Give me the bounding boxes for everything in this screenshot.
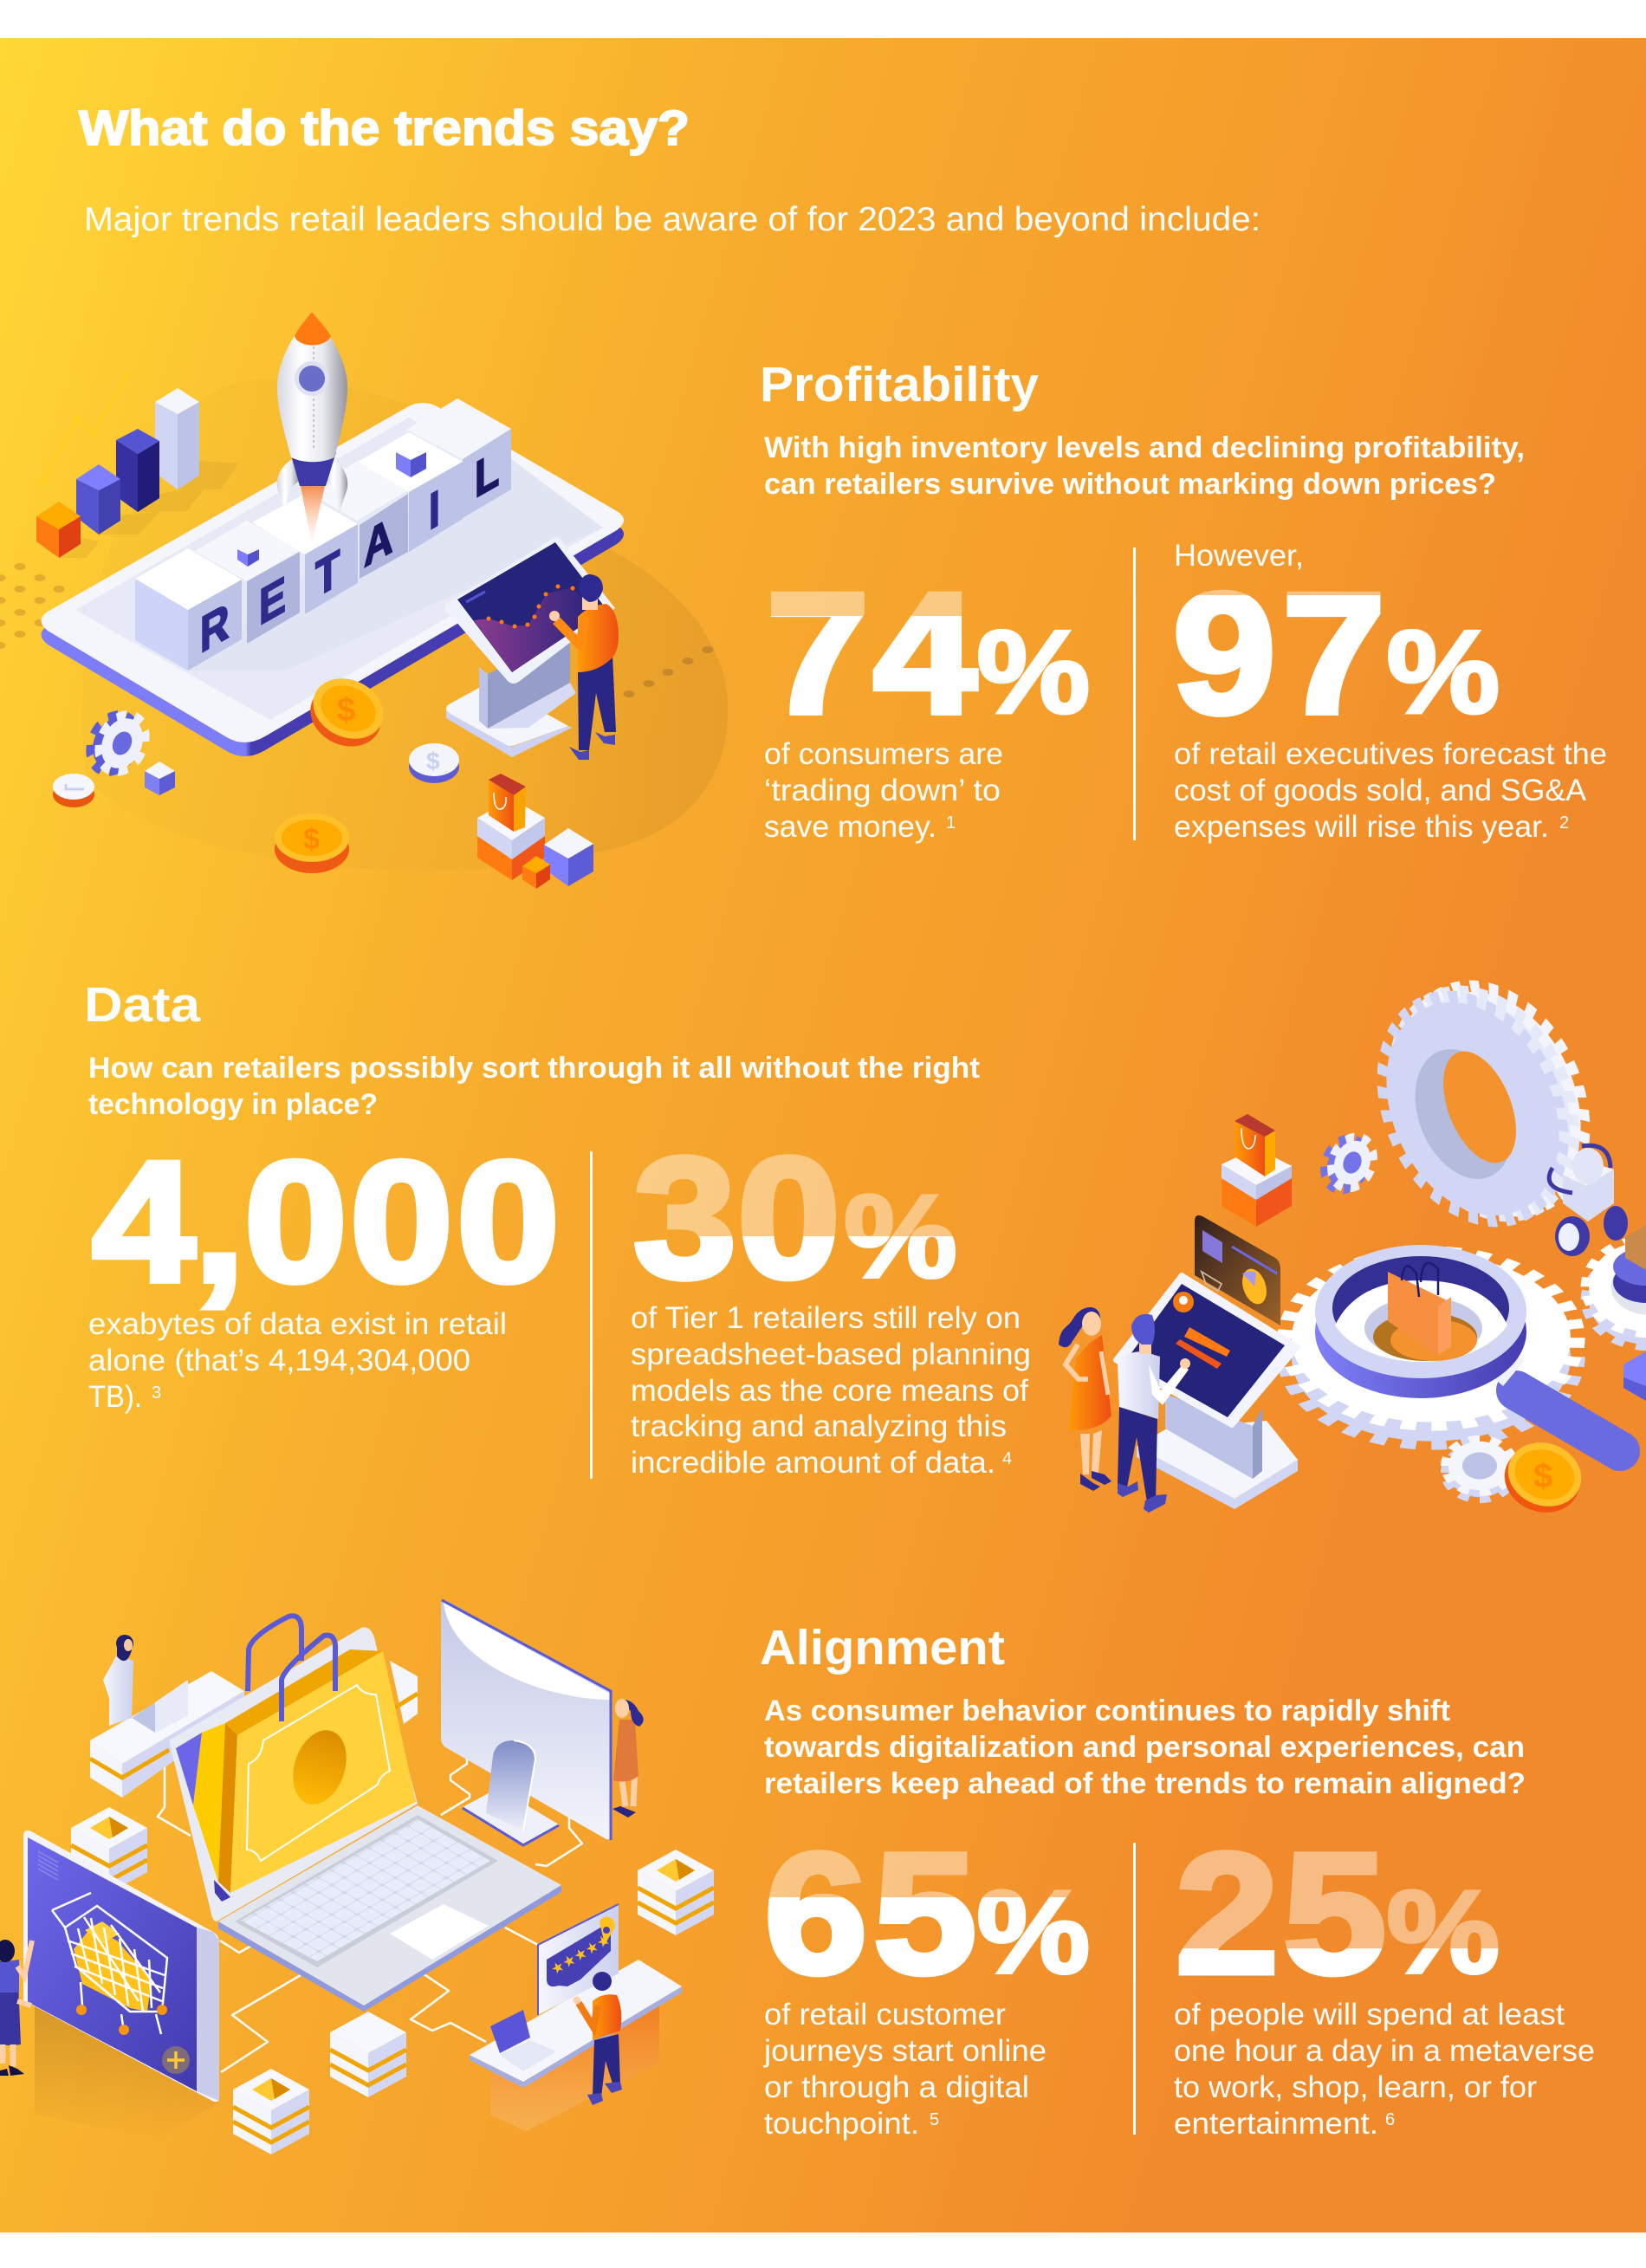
- cube: white purple: [544, 828, 593, 886]
- bar: purple: [76, 464, 120, 535]
- magnifier handle: [1488, 1353, 1620, 1451]
- question: Alignment: towards digitalization and personal experiences, can: [764, 1731, 1525, 1764]
- stack C: [330, 2012, 406, 2097]
- block: R: [135, 548, 242, 671]
- tablet with cart: [23, 1831, 219, 2140]
- stat: 65%: %: [977, 1866, 1090, 1998]
- divider: [1133, 548, 1136, 840]
- decorative dots left: [0, 563, 64, 649]
- cube: orange: [36, 502, 81, 558]
- stat caption: 30%: tracking and analyzing this: [631, 1409, 1007, 1443]
- stat caption: 97%: 2: [1559, 813, 1569, 833]
- woman at tablet: [0, 1940, 32, 2076]
- stat: 4,000: 0: [350, 1125, 453, 1318]
- question: Profitability: With high inventory levels and declining profitability,: [764, 431, 1525, 464]
- connector lines: [158, 1714, 582, 2072]
- cube: small orange: [522, 856, 550, 889]
- woman: [1059, 1307, 1111, 1491]
- monitor: [441, 1600, 612, 1845]
- stat caption: 74%: [764, 737, 1003, 844]
- big upright gear: [1348, 958, 1619, 1249]
- stat caption: 4,000: exabytes of data exist in retail: [88, 1307, 507, 1341]
- kiosk stand: [1165, 1394, 1262, 1479]
- purple box right: [1623, 1351, 1646, 1401]
- bar: navy: [116, 429, 159, 512]
- bar shadows: [59, 461, 238, 558]
- decorative dots right: [624, 646, 714, 697]
- block: T: T: [315, 539, 340, 608]
- stat caption: 25%: one hour a day in a metaverse: [1174, 2034, 1595, 2068]
- phone platform: [42, 403, 624, 756]
- robot: [1549, 1145, 1628, 1256]
- coin: silver: [409, 743, 459, 783]
- stat: 25%: 5: [1283, 1817, 1386, 2009]
- stack D: [233, 2069, 309, 2155]
- laptop deck: [218, 1805, 561, 2012]
- stat: 4,000: ,: [194, 1125, 245, 1318]
- large flat gear: [1286, 1251, 1577, 1445]
- stat caption: 25%: to work, shop, learn, or for: [1174, 2070, 1537, 2104]
- stat: 25%: 2: [1176, 1817, 1279, 2009]
- stat caption: 74%: ‘trading down’ to: [764, 774, 1001, 807]
- stat: 30%: 0: [737, 1121, 840, 1313]
- stat: 4,000: 4: [92, 1125, 195, 1318]
- question: Profitability: [764, 431, 1525, 501]
- man with tablet: [1118, 1314, 1190, 1513]
- stat: 4,000: 0: [244, 1125, 347, 1318]
- block: E: [195, 521, 300, 644]
- kiosk: [444, 537, 615, 757]
- coin: gold centre: $: [337, 692, 355, 729]
- small cube on I: [396, 452, 426, 477]
- bag handle front: [282, 1636, 335, 1721]
- coin: bottom gold: $: [303, 823, 320, 856]
- stat: 74%: 4: [873, 557, 976, 749]
- stat caption: 4,000: 3: [152, 1383, 161, 1403]
- rocket: [277, 312, 347, 511]
- small gear bottom: [1445, 1439, 1514, 1500]
- shopping cart: [52, 1893, 167, 2035]
- trend line: [40, 374, 128, 483]
- question: Data: [88, 1052, 980, 1121]
- stat caption: 30%: incredible amount of data.: [631, 1446, 995, 1480]
- stat caption: 25%: 6: [1385, 2110, 1395, 2129]
- stat: 4,000: 0: [457, 1125, 560, 1318]
- illustration: data gears and magnifier: [1059, 958, 1646, 1523]
- text: However: However,: [1174, 539, 1304, 573]
- stat caption: 97%: of retail executives forecast the: [1174, 737, 1607, 771]
- stat caption: 4,000: [88, 1307, 507, 1414]
- small cube on E: [237, 542, 259, 567]
- stat: 97%: 7: [1282, 557, 1385, 749]
- stat caption: 65%: touchpoint.: [764, 2107, 919, 2141]
- question: Data: How can retailers possibly sort through it all without the right: [88, 1052, 980, 1085]
- block: A: [306, 462, 408, 579]
- magnifier lens: [1315, 1245, 1526, 1398]
- stat caption: 4,000: TB).: [88, 1380, 142, 1414]
- stat: 25%: %: [1387, 1866, 1500, 1998]
- block: T: [252, 494, 358, 614]
- man at desk: [574, 1972, 622, 2105]
- stat caption: 97%: cost of goods sold, and SG&A: [1174, 774, 1587, 807]
- block: E: E: [259, 565, 286, 636]
- stack B: [638, 1850, 714, 1935]
- gift blocks: [477, 799, 545, 880]
- kiosk screen: [1116, 1275, 1298, 1425]
- stat: 65%: 5: [873, 1817, 976, 2009]
- stat: 74%: 7: [767, 557, 869, 749]
- question: Alignment: retailers keep ahead of the trends to remain aligned?: [764, 1767, 1526, 1800]
- stack A: [71, 1807, 147, 1893]
- coin: silver: $: [426, 748, 440, 774]
- stat: 65%: 6: [764, 1817, 867, 2009]
- stat caption: 25%: of people will spend at least: [1174, 1998, 1565, 2031]
- small laptop: [490, 2010, 556, 2071]
- block: L: L: [475, 439, 499, 509]
- shopping bag: [489, 774, 526, 832]
- stat caption: 30%: of Tier 1 retailers still rely on: [631, 1301, 1021, 1335]
- man at kiosk: [549, 574, 619, 760]
- coin: small white: [53, 774, 94, 807]
- dark dashboard panel: [1195, 1215, 1280, 1325]
- illustration: retail rocket platform: [0, 312, 728, 889]
- block: A: A: [364, 506, 393, 578]
- small gear top: [1317, 1131, 1381, 1196]
- bar: lavender: [155, 388, 199, 489]
- block: L: [406, 399, 511, 518]
- stat caption: 74%: save money.: [764, 810, 936, 844]
- stat caption: 30%: [631, 1301, 1031, 1480]
- stat caption: 30%: spreadsheet-based planning: [631, 1338, 1031, 1371]
- stat caption: 97%: [1174, 737, 1607, 844]
- backdrop blob: [82, 379, 728, 871]
- coin: [1495, 1432, 1591, 1523]
- stat caption: 65%: or through a digital: [764, 2070, 1029, 2104]
- woman by monitor: [612, 1699, 644, 1818]
- rocket flame: [301, 486, 325, 544]
- cube: small purple: [145, 761, 175, 795]
- stat: 30%: 3: [633, 1121, 736, 1313]
- stat caption: 4,000: alone (that’s 4,194,304,000: [88, 1344, 470, 1377]
- stat caption: 74%: 1: [946, 813, 956, 833]
- stat: 74%: %: [977, 606, 1090, 737]
- question: Data: technology in place?: [88, 1088, 378, 1121]
- laptop screen frame: [169, 1627, 418, 1921]
- stat caption: 65%: [763, 1998, 1047, 2141]
- stat: 97%: %: [1387, 606, 1500, 737]
- subtitle: Major trends retail leaders should be aware of for 2023 and beyond include:: [84, 201, 1260, 238]
- divider: [590, 1151, 593, 1479]
- kiosk base: [1137, 1421, 1298, 1509]
- stat caption: 25%: entertainment.: [1174, 2107, 1378, 2141]
- desk behind laptop: [390, 1661, 418, 1724]
- review panel: [538, 1904, 619, 2015]
- stat caption: 74%: of consumers are: [764, 737, 1003, 771]
- right gear with box: [1586, 1225, 1646, 1347]
- stat: 97%: 9: [1173, 557, 1276, 749]
- desk right: [470, 1960, 682, 2131]
- block: R: R: [200, 592, 230, 664]
- back desk stack: [90, 1671, 244, 1798]
- stat caption: 65%: 5: [930, 2110, 939, 2129]
- illustration: omnichannel laptop: [0, 1600, 714, 2155]
- coin: bottom gold: [275, 813, 349, 873]
- section heading: Data: Data: [84, 977, 201, 1033]
- coin: gold centre: [301, 667, 393, 758]
- block: I: [358, 432, 463, 552]
- purple screen wallpaper: [176, 1733, 202, 1805]
- stat caption: 65%: of retail customer: [764, 1998, 1006, 2031]
- section heading: Alignment: Alignment: [760, 1620, 1005, 1675]
- question: Alignment: As consumer behavior continues to rapidly shift: [764, 1695, 1450, 1727]
- stat caption: 30%: models as the core means of: [631, 1374, 1028, 1408]
- orange bag in lens: [1388, 1263, 1451, 1355]
- stat caption: 25%: [1174, 1998, 1595, 2141]
- question: Profitability: can retailers survive without marking down prices?: [764, 468, 1496, 501]
- bearded man: [103, 1635, 133, 1726]
- orange block with bag: [1222, 1114, 1292, 1227]
- block: I: I: [429, 479, 440, 541]
- stat caption: 97%: expenses will rise this year.: [1174, 810, 1549, 844]
- divider: [1133, 1843, 1136, 2135]
- bag handle back: [248, 1616, 301, 1691]
- coin: $: [1533, 1457, 1552, 1495]
- stat caption: 30%: 4: [1002, 1449, 1012, 1468]
- question: Alignment: [764, 1695, 1526, 1800]
- big yellow bag: [193, 1649, 416, 1902]
- review panel: ★★★★★: [548, 1931, 613, 1978]
- title: What do the trends say?: [79, 100, 690, 156]
- mini laptop on back desk: [132, 1680, 188, 1733]
- section heading: Profitability: Profitability: [760, 357, 1039, 412]
- gear: small purple: [81, 707, 154, 780]
- stat caption: 65%: journeys start online: [763, 2034, 1047, 2068]
- stat: 30%: %: [844, 1170, 957, 1302]
